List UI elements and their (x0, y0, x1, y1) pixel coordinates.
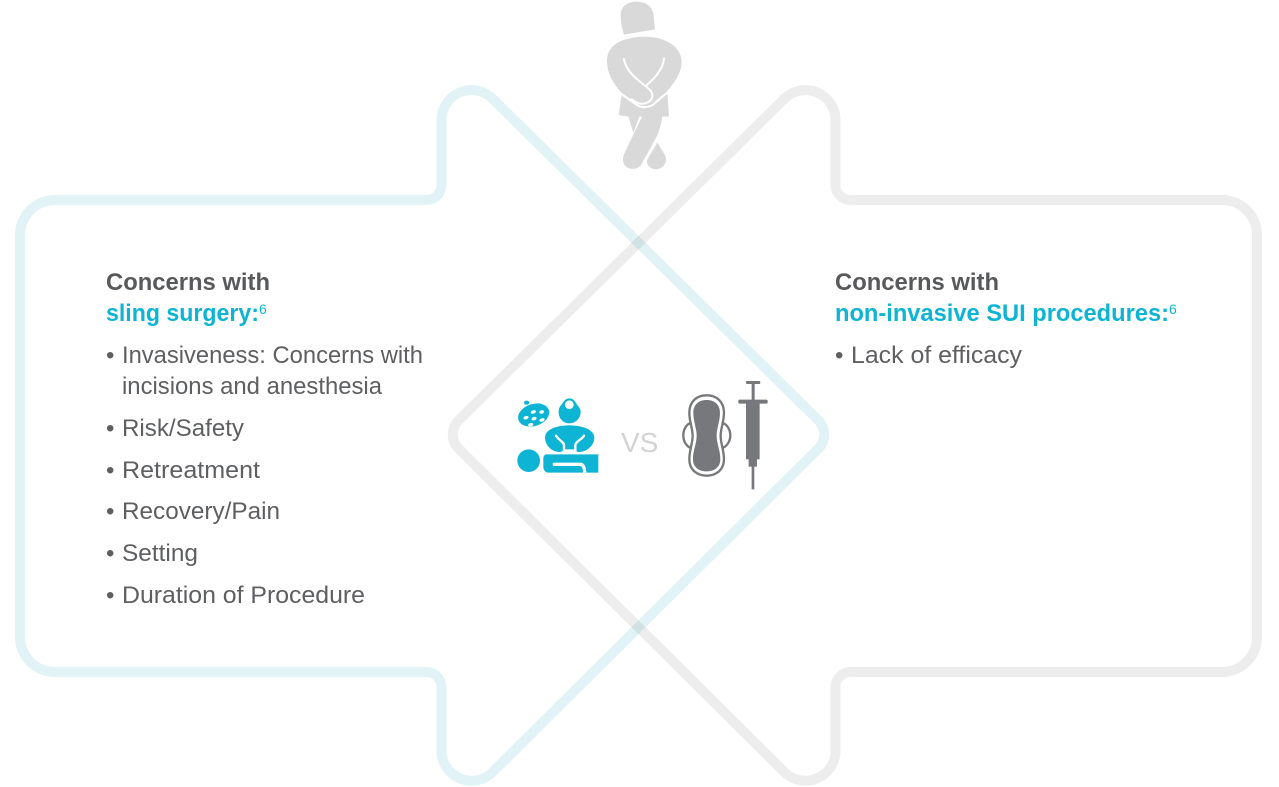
heading: concerns with non-invasive procedures: 6 (1169, 301, 1177, 317)
panel: sling surgery arrow outline (20, 90, 824, 781)
heading: concerns with non-invasive procedures (835, 269, 1177, 327)
text block: sling surgery concerns list: Setting (122, 540, 198, 567)
text block: non-invasive concerns list: • (835, 342, 843, 369)
heading: concerns with sling surgery: sling surgery: (106, 300, 259, 327)
icon: surgeon and patient (515, 398, 598, 473)
heading: concerns with non-invasive procedures: Concerns with (835, 269, 999, 296)
icon: sanitary pad (683, 395, 730, 476)
heading: concerns with non-invasive procedures: non-invasive SUI procedures: (835, 300, 1169, 327)
text block: sling surgery concerns list: • (106, 498, 114, 525)
panel: non-invasive procedures arrow outline (453, 90, 1257, 781)
text block: sling surgery concerns list: Invasiveness: Concerns with (122, 342, 423, 369)
text block: non-invasive concerns list: Lack of efficacy (851, 342, 1022, 369)
text: vs: VS (621, 427, 658, 458)
text block: sling surgery concerns list: • (106, 415, 114, 442)
text block: sling surgery concerns list: incisions and anesthesia (122, 373, 383, 400)
heading: concerns with sling surgery: Concerns with (106, 269, 270, 296)
text block: sling surgery concerns list: • (106, 540, 114, 567)
icon: person with crossed legs (606, 2, 683, 169)
text block: sling surgery concerns list: Recovery/Pain (122, 498, 280, 525)
text block: sling surgery concerns list: • (106, 342, 114, 369)
icon: syringe (738, 381, 768, 489)
text block: sling surgery concerns list: Duration of Procedure (122, 582, 365, 609)
text block: sling surgery concerns list: • (106, 457, 114, 484)
heading: concerns with sling surgery (106, 269, 270, 327)
text block: sling surgery concerns list: • (106, 582, 114, 609)
text block: sling surgery concerns list: Retreatment (122, 457, 260, 484)
text block: sling surgery concerns list: Risk/Safety (122, 415, 244, 442)
heading: concerns with sling surgery: 6 (259, 301, 267, 317)
text block: sling surgery concerns list (106, 342, 423, 609)
